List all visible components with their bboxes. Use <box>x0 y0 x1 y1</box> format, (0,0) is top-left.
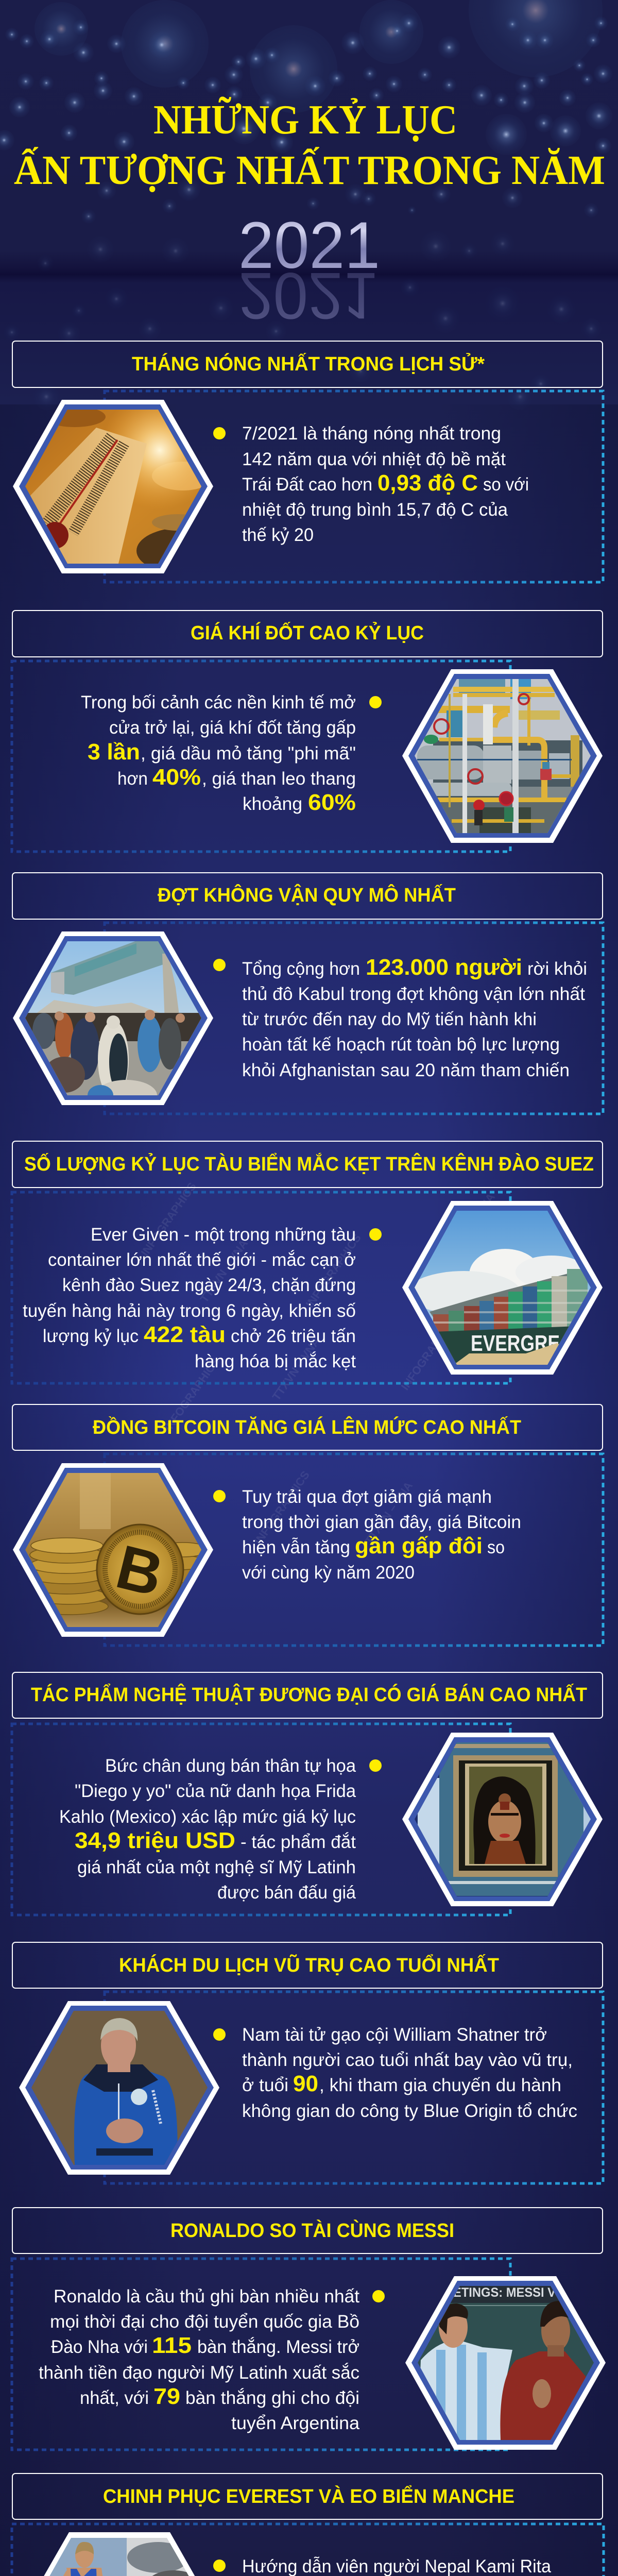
watermarks <box>139 1180 497 1547</box>
bullet <box>369 696 382 708</box>
text block: chở 26 triệu tấn <box>231 1326 356 1346</box>
text block <box>242 955 587 1080</box>
text block: 142 năm qua với nhiệt độ bề mặt <box>242 449 506 469</box>
text block: nhất, với <box>80 2388 149 2408</box>
text block: container lớn nhất thế giới - mắc cạn ở <box>48 1250 356 1270</box>
text block: thành người cao tuổi nhất bay vào vũ trụ, <box>242 2050 573 2070</box>
text block: được bán đấu giá <box>217 1883 356 1903</box>
text block: 34,9 triệu USD <box>75 1828 235 1853</box>
text block: 7/2021 là tháng nóng nhất trong <box>242 423 501 444</box>
heading <box>12 2208 603 2253</box>
text block: hiện vẫn tăng <box>242 1537 350 1557</box>
panel: Bitcoin <box>12 1404 603 1646</box>
text block: với cùng kỳ năm 2020 <box>242 1563 415 1583</box>
bullet <box>213 1490 226 1502</box>
panel: Ronaldo vs Messi <box>12 2208 606 2450</box>
text block: trong thời gian gần đây, giá Bitcoin <box>242 1512 521 1532</box>
heading: GIÁ KHÍ ĐỐT CAO KỶ LỤC <box>191 621 424 644</box>
bullet <box>213 2560 226 2572</box>
text block: Tổng cộng hơn <box>242 959 360 979</box>
text block: Bức chân dung bán thân tự họa <box>105 1756 356 1776</box>
text block: bàn thắng. Messi trở <box>197 2337 359 2357</box>
panel: hottest month <box>12 341 603 582</box>
heading <box>12 341 603 387</box>
text block: 60% <box>308 790 356 815</box>
text block: Đào Nha với <box>51 2337 148 2357</box>
bullet <box>369 1228 382 1241</box>
photo: Frida Kahlo painting in hexagon <box>402 1732 603 1907</box>
heading: SỐ LƯỢNG KỶ LỤC TÀU BIỂN MẮC KẸT TRÊN KÊNH ĐÀO SUEZ <box>24 1152 594 1175</box>
watermarks: TTXVN – VNA <box>270 1335 322 1403</box>
text block: 123.000 người <box>366 955 522 980</box>
dotted frame <box>12 1192 510 1383</box>
heading <box>12 873 603 919</box>
watermarks: INFOGRAPHICS <box>139 1180 199 1259</box>
photo: Messi and Ronaldo in hexagon <box>405 2275 606 2450</box>
dotted frame <box>105 1454 603 1646</box>
heading: ĐỢT KHÔNG VẬN QUY MÔ NHẤT <box>158 883 456 906</box>
text block: "Diego y yo" của nữ danh họa Frida <box>75 1781 356 1801</box>
heading: THÁNG NÓNG NHẤT TRONG LỊCH SỬ* <box>132 352 485 375</box>
dotted frame <box>12 661 510 852</box>
text block: , giá dầu mỏ tăng "phi mã" <box>141 743 356 764</box>
watermarks: INFOGRAPHICS <box>303 1231 364 1310</box>
bullet <box>213 2028 226 2041</box>
text block: Ever Given - một trong những tàu <box>91 1225 356 1245</box>
heading <box>12 611 603 657</box>
text block: hàng hóa bị mắc kẹt <box>195 1351 356 1371</box>
text block: 0,93 độ C <box>377 470 478 496</box>
bullet <box>213 427 226 439</box>
panel: oldest space tourist <box>12 1942 603 2183</box>
photo: Ever Given ship in hexagon: EVERGRE <box>471 1331 560 1356</box>
text block <box>242 2025 577 2121</box>
text block: so <box>487 1537 505 1557</box>
text block: kênh đào Suez ngày 24/3, chặn đứng <box>62 1275 356 1295</box>
text block <box>242 1487 521 1583</box>
dotted frame <box>12 2524 604 2576</box>
year 2021: 2021 <box>238 209 380 282</box>
watermarks: INFOGRAPHICS <box>399 1314 459 1393</box>
dotted frame <box>12 1724 510 1915</box>
bullet <box>372 2290 385 2302</box>
text block: nhiệt độ trung bình 15,7 độ C của <box>242 500 508 520</box>
heading <box>12 1141 603 1188</box>
watermarks: TTXVN – VNA <box>363 1479 415 1547</box>
title <box>14 97 605 193</box>
heading: RONALDO SO TÀI CÙNG MESSI <box>170 2219 454 2242</box>
text block: mọi thời đại cho đội tuyển quốc gia Bồ <box>50 2312 359 2332</box>
photo: gold Bitcoin in hexagon <box>13 1462 214 1637</box>
text block <box>39 2286 360 2433</box>
heading <box>12 1404 603 1450</box>
text block: 79 <box>153 2384 180 2409</box>
heading: KHÁCH DU LỊCH VŨ TRỤ CAO TUỔI NHẤT <box>119 1953 499 1976</box>
text block: Hướng dẫn viên người Nepal Kami Rita <box>242 2556 552 2576</box>
photo: gas pipes in hexagon <box>402 668 603 843</box>
watermarks: TTXVN – VNA <box>445 1191 497 1259</box>
text block: thủ đô Kabul trong đợt không vận lớn nhất <box>242 984 585 1004</box>
text block: hoàn tất kế hoạch rút toàn bộ lực lượng <box>242 1035 560 1055</box>
text block <box>23 1225 356 1371</box>
panel: gas prices <box>12 611 603 852</box>
dotted frame <box>105 391 603 582</box>
year reflection: 2021 <box>238 259 377 332</box>
photo: swimmer and climber in hexagon <box>19 2532 219 2576</box>
text block: thế kỷ 20 <box>242 525 314 545</box>
text block: tuyến hàng hải này trong 6 ngày, khiến số <box>23 1301 356 1321</box>
watermarks: INFOGRAPHICS <box>252 1468 312 1547</box>
text block: giá nhất của một nghệ sĩ Mỹ Latinh <box>77 1857 356 1877</box>
text block: - tác phẩm đắt <box>241 1832 356 1852</box>
text block: rời khỏi <box>527 959 587 979</box>
text block: , giá than leo thang <box>202 769 356 789</box>
watermarks: INFOGRAPHICS <box>162 1355 222 1434</box>
watermarks: TTXVN – VNA <box>198 1237 250 1305</box>
text block: Trái Đất cao hơn <box>242 474 372 495</box>
photo: Messi and Ronaldo in hexagon: ETINGS: MESSI V <box>453 2285 556 2300</box>
text block <box>242 423 529 545</box>
panel: artwork <box>12 1672 603 1915</box>
text block: từ trước đến nay do Mỹ tiến hành khi <box>242 1009 537 1029</box>
text block: bàn thắng ghi cho đội <box>185 2388 359 2408</box>
dotted frame <box>12 2259 510 2450</box>
title: NHỮNG KỶ LỤC <box>153 97 457 143</box>
text block: gần gấp đôi <box>355 1533 483 1558</box>
bullet <box>369 1759 382 1772</box>
text block: so với <box>483 474 529 495</box>
text block: 115 <box>152 2333 192 2358</box>
text block: lượng kỷ lục <box>43 1326 139 1346</box>
text block: Trong bối cảnh các nền kinh tế mở <box>81 692 356 713</box>
text block: 40% <box>152 765 201 790</box>
text block: Nam tài tử gạo cội William Shatner trở <box>242 2025 547 2045</box>
text block: , khi tham gia chuyến du hành <box>319 2075 561 2095</box>
title: ẤN TƯỢNG NHẤT TRONG NĂM <box>14 147 605 193</box>
text block: hơn <box>117 769 148 789</box>
heading <box>12 1672 603 1718</box>
bullet <box>213 959 226 971</box>
photo: thermometer in hexagon <box>13 400 213 573</box>
bokeh night sky header background <box>0 0 618 410</box>
text block: tuyển Argentina <box>231 2413 360 2433</box>
text block: ở tuổi <box>242 2075 288 2095</box>
text block <box>81 692 356 815</box>
dotted frame <box>105 1992 603 2183</box>
text block: thành tiền đạo người Mỹ Latinh xuất sắc <box>39 2363 359 2383</box>
dotted frame <box>105 923 603 1114</box>
text block: Ronaldo là cầu thủ ghi bàn nhiều nhất <box>54 2286 359 2307</box>
heading <box>12 1942 603 1988</box>
text block: khỏi Afghanistan sau 20 năm tham chiến <box>242 1060 570 1080</box>
heading: TÁC PHẨM NGHỆ THUẬT ĐƯƠNG ĐẠI CÓ GIÁ BÁN CAO NHẤT <box>31 1683 587 1706</box>
panel: Everest and English Channel <box>12 2473 604 2576</box>
text block: 3 lần <box>88 739 140 765</box>
heading: CHINH PHỤC EVEREST VÀ EO BIỂN MANCHE <box>103 2484 514 2507</box>
panel: airlift <box>12 873 603 1114</box>
text block: khoảng <box>243 794 302 814</box>
heading: ĐỒNG BITCOIN TĂNG GIÁ LÊN MỨC CAO NHẤT <box>93 1416 521 1438</box>
text block: 90 <box>293 2071 318 2096</box>
panel: Suez canal <box>12 1141 603 1383</box>
photo: Ever Given ship in hexagon <box>402 1200 603 1375</box>
photo: gold Bitcoin in hexagon: B <box>110 1532 170 1609</box>
text block: Tuy trải qua đợt giảm giá mạnh <box>242 1487 492 1507</box>
photo: Kabul airport crowd in hexagon <box>13 930 214 1111</box>
text block: Kahlo (Mexico) xác lập mức giá kỷ lục <box>59 1807 356 1827</box>
text block <box>59 1756 356 1903</box>
text block: 422 tàu <box>144 1322 226 1347</box>
text block: cửa trở lại, giá khí đốt tăng gấp <box>109 718 356 738</box>
heading <box>12 2473 603 2519</box>
photo: William Shatner in hexagon <box>19 2000 220 2175</box>
text block: không gian do công ty Blue Origin tổ chức <box>242 2101 577 2121</box>
